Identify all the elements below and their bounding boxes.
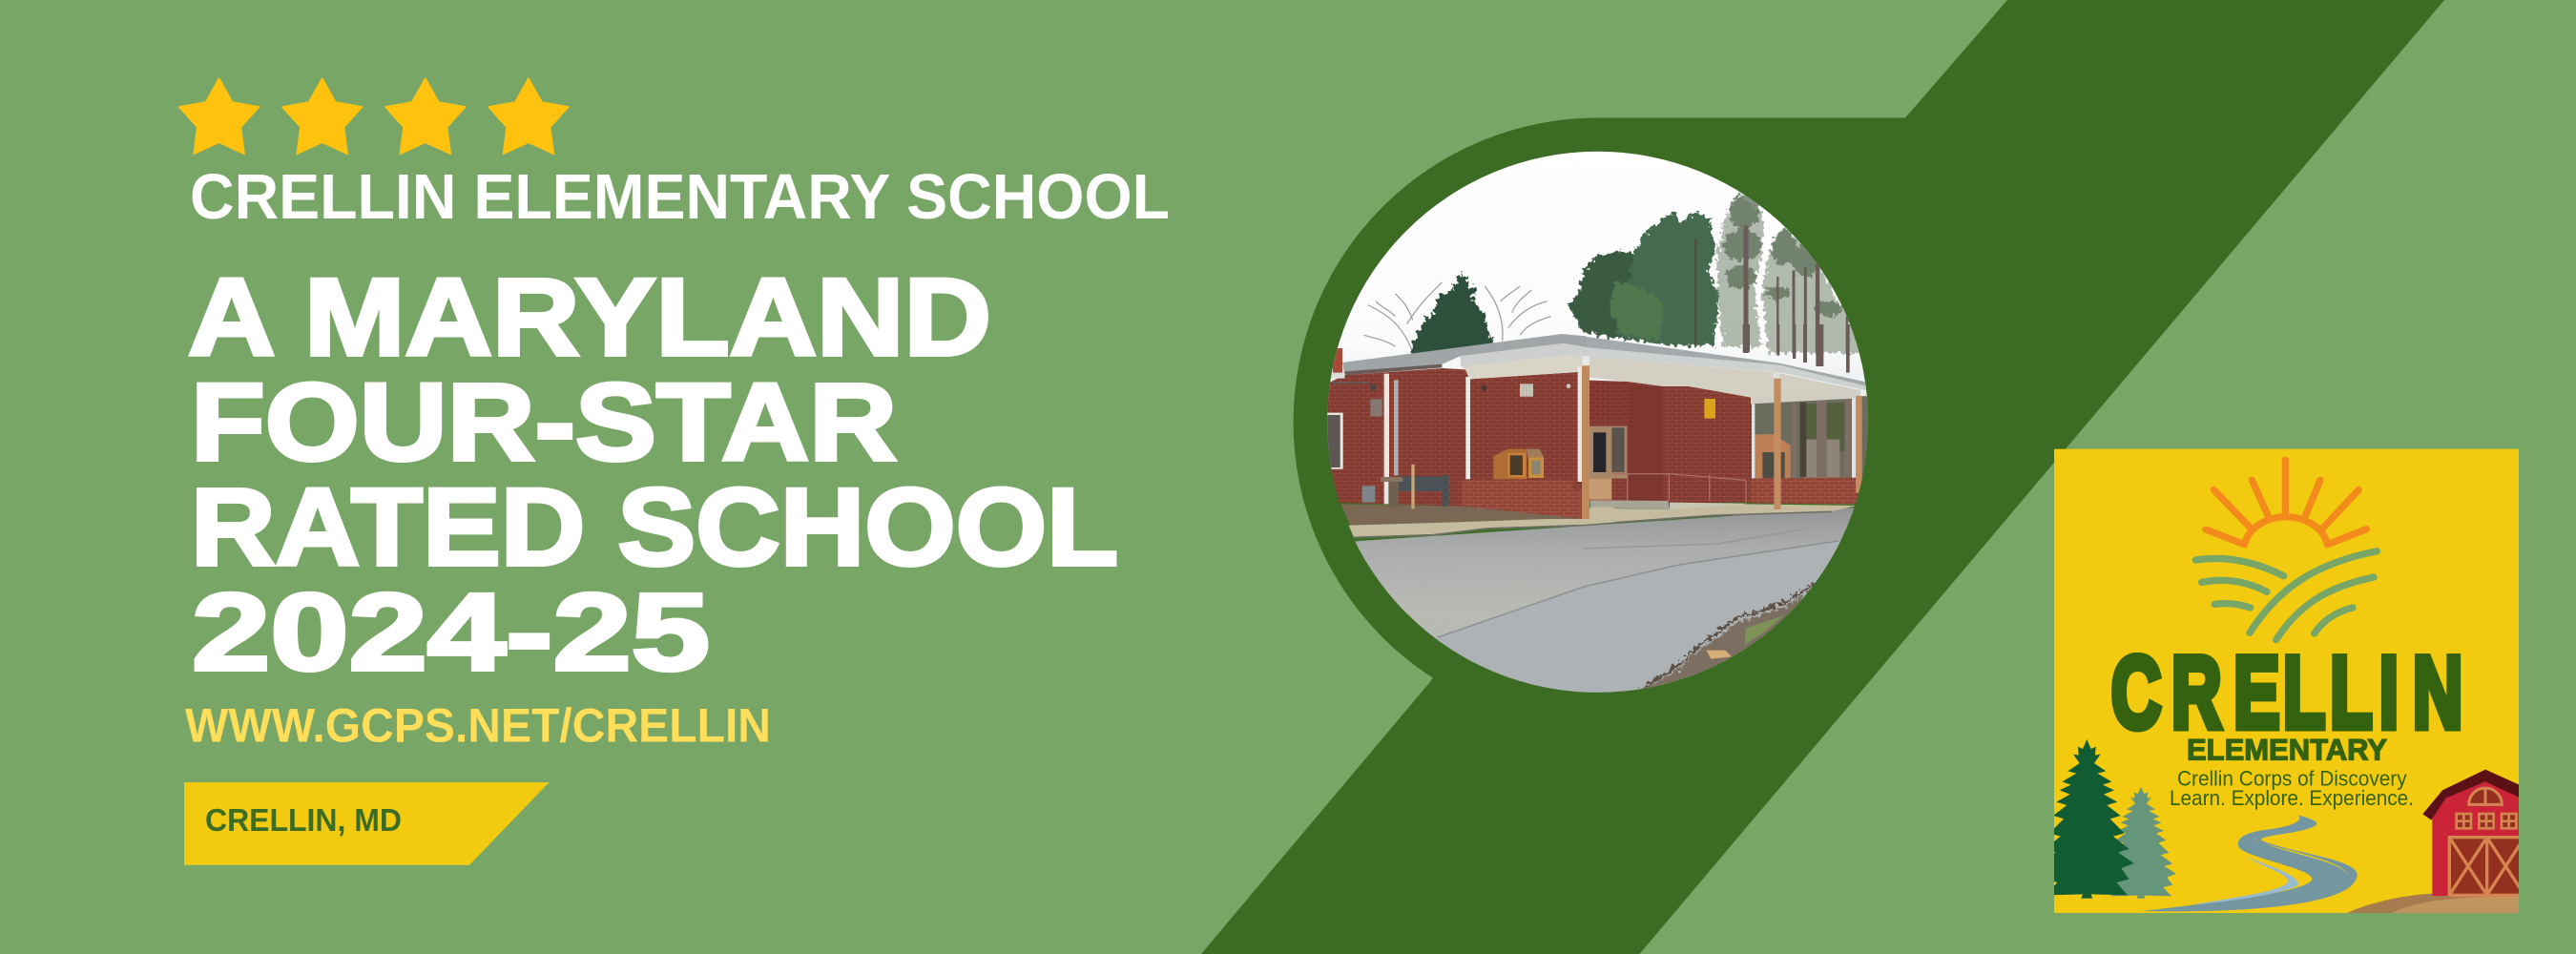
website url: WWW.GCPS.NET/CRELLIN bbox=[185, 698, 771, 752]
school name: CRELLIN ELEMENTARY SCHOOL bbox=[190, 161, 1170, 233]
star 4 bbox=[488, 78, 569, 155]
star 2 bbox=[282, 78, 363, 155]
canopy roof bbox=[1584, 337, 1867, 386]
bare trees and small pine bbox=[1364, 273, 1551, 356]
building left section bbox=[1325, 334, 1614, 537]
tagline 1: Crellin Corps of Discovery bbox=[2177, 766, 2407, 790]
star 3 bbox=[385, 78, 466, 155]
headline line 1: A MARYLAND bbox=[188, 257, 991, 379]
white pipes bbox=[1752, 398, 1857, 478]
roadside dirt and grass bbox=[1636, 582, 1815, 689]
building right section and roadside bbox=[1584, 324, 1870, 699]
star rating bbox=[179, 78, 569, 155]
forest and sky behind canopy bbox=[1751, 396, 1870, 480]
brick tower corner bbox=[1333, 348, 1342, 374]
entry door bbox=[1589, 425, 1628, 479]
headline line 4: 2024-25 bbox=[192, 571, 710, 694]
bench and birdbath bbox=[1362, 465, 1449, 508]
icon: hill bbox=[2347, 893, 2519, 913]
icon: red barn bbox=[2422, 770, 2524, 896]
icon: river bbox=[2142, 815, 2358, 911]
little library box bbox=[1493, 449, 1544, 479]
logo background bbox=[2054, 449, 2519, 913]
mulch bed bbox=[1340, 504, 1584, 526]
logo subtitle: ELEMENTARY bbox=[2187, 734, 2387, 767]
school logo bbox=[2040, 449, 2524, 913]
ramp railing bbox=[1613, 474, 1746, 507]
icon: dark pine tree bbox=[2040, 739, 2134, 899]
dark green diagonal band with photo ring bbox=[1201, 0, 2444, 954]
star 1 bbox=[179, 78, 260, 155]
sidewalk left bbox=[1349, 508, 1614, 537]
tag text: CRELLIN, MD bbox=[205, 802, 402, 838]
headline line 3: RATED SCHOOL bbox=[191, 467, 1118, 589]
front pillar bbox=[1582, 365, 1584, 519]
pipes bbox=[1384, 374, 1389, 504]
location tag bbox=[184, 782, 550, 865]
low brick wall bbox=[1462, 480, 1573, 489]
tagline 2: Learn. Explore. Experience. bbox=[2170, 786, 2414, 810]
logo tagline bbox=[2170, 766, 2414, 810]
vent bbox=[1370, 399, 1382, 417]
headline line 2: FOUR-STAR bbox=[191, 362, 897, 484]
canopy soffit bbox=[1584, 356, 1860, 398]
logo wordmark: CRELLIN bbox=[2111, 636, 2462, 750]
sidewalk bbox=[1584, 504, 1858, 525]
icon: sun bbox=[2206, 460, 2366, 545]
school photo bbox=[1327, 151, 1868, 693]
wall lights bbox=[1370, 384, 1377, 390]
support pillars bbox=[1584, 365, 1862, 520]
large pine trees bbox=[1568, 194, 1860, 353]
brick walls bbox=[1584, 380, 1752, 503]
wall plaque bbox=[1520, 384, 1533, 397]
soffit left bbox=[1460, 356, 1589, 379]
roof left bbox=[1342, 334, 1587, 371]
yellow sign bbox=[1704, 399, 1715, 419]
concrete base bbox=[1590, 500, 1670, 509]
road bbox=[1341, 508, 1855, 693]
brick wall bbox=[1325, 368, 1584, 518]
icon: light pine tree bbox=[2106, 787, 2176, 899]
tag shape bbox=[184, 782, 550, 865]
headline bbox=[188, 257, 1118, 694]
shed bbox=[1755, 434, 1791, 478]
window bbox=[1326, 413, 1343, 469]
sky bbox=[1321, 143, 1875, 429]
icon: fields bbox=[2195, 551, 2377, 640]
